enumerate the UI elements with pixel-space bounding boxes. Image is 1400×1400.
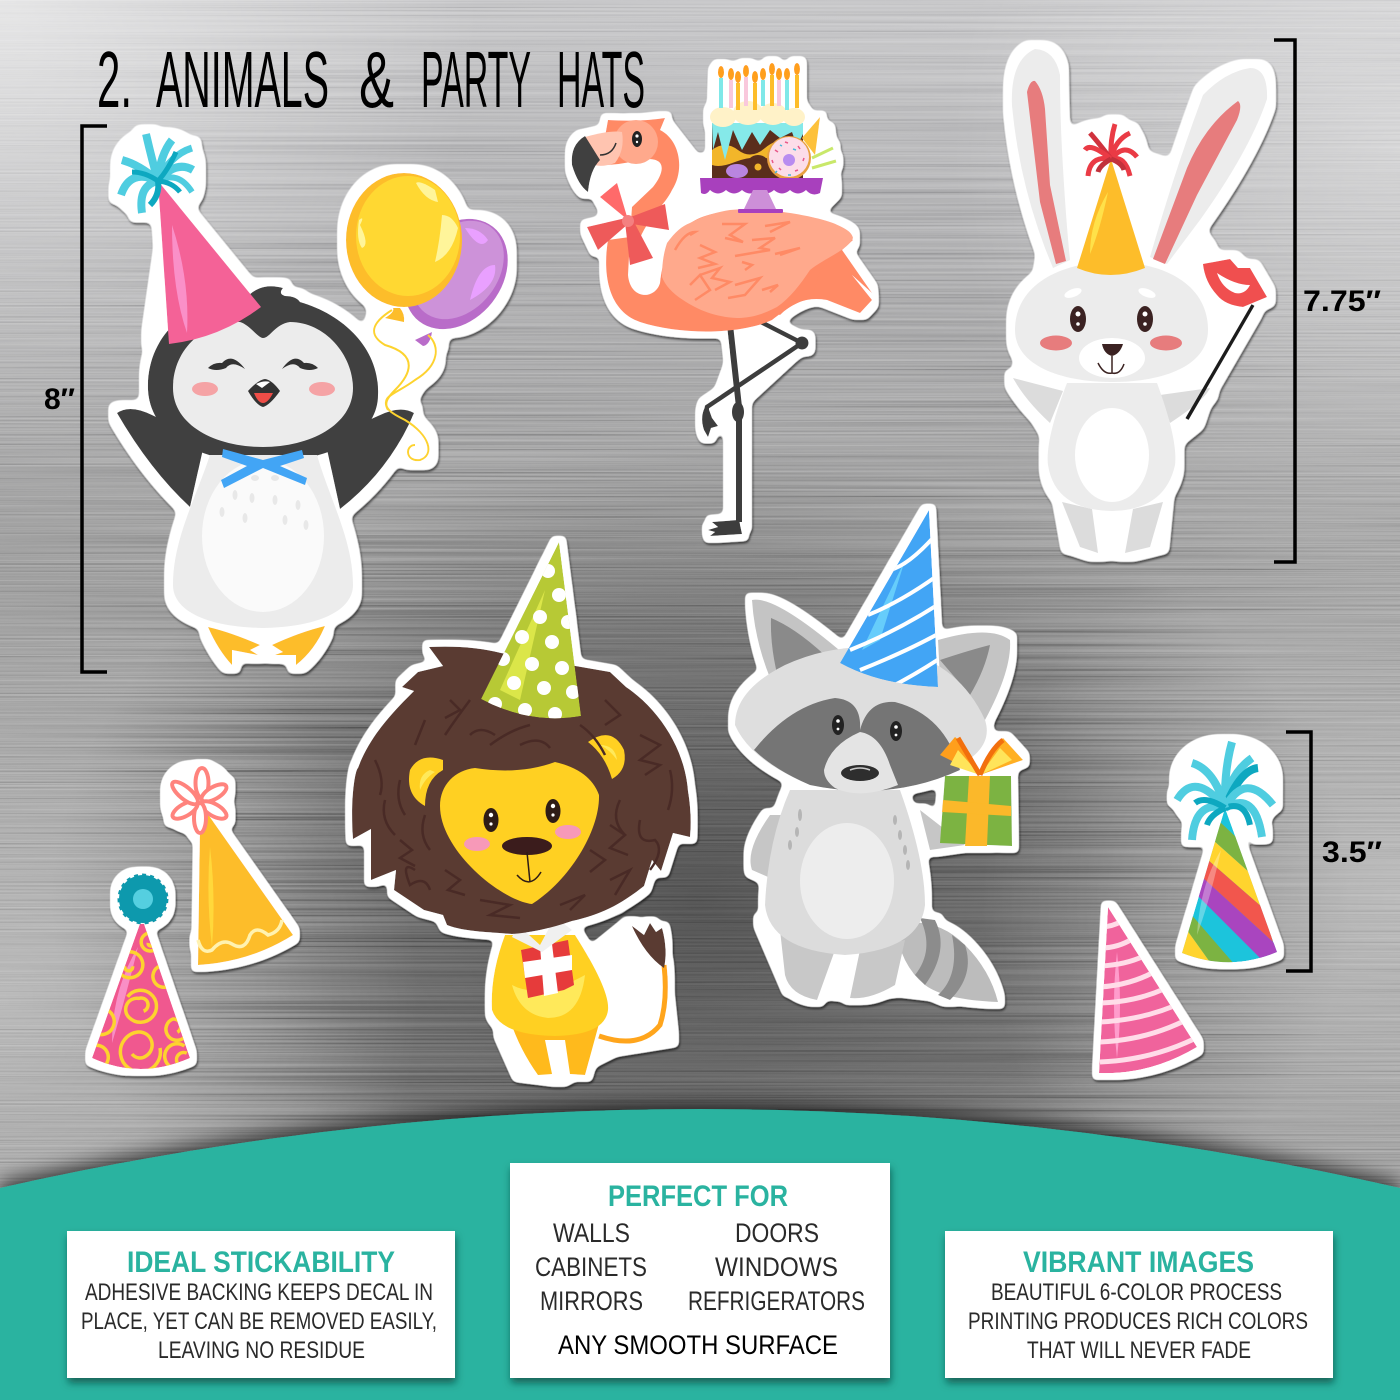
lion hat polka dots	[481, 542, 581, 721]
penguin arms	[117, 409, 414, 509]
balloon strings	[374, 310, 436, 460]
bunny hat	[1077, 159, 1145, 275]
gift bow	[940, 737, 1023, 775]
lion legs	[510, 1020, 600, 1075]
bracket: 3.5 inch	[1286, 732, 1311, 971]
cake stand	[700, 178, 823, 213]
lion tail	[599, 923, 666, 1041]
red bow	[587, 183, 669, 265]
small donut	[746, 155, 770, 179]
label: 3.5 inches: 3.5″	[1322, 836, 1382, 869]
spiral hat cone	[92, 918, 190, 1072]
title: ANIMALS	[156, 35, 329, 124]
sticker: lion	[352, 542, 691, 1080]
bracket: 7.75 inch	[1274, 40, 1295, 562]
lion belly	[512, 975, 585, 1018]
belly feathers	[220, 475, 308, 530]
lips on stick	[1187, 259, 1267, 419]
bunny legs	[1062, 502, 1163, 553]
raccoon legs	[780, 930, 905, 1000]
sticker: raccoon	[735, 510, 1023, 1002]
raccoon body	[765, 790, 925, 955]
title	[97, 35, 645, 124]
beak	[572, 132, 623, 192]
cake body	[712, 123, 803, 178]
raccoon hat	[840, 510, 945, 690]
purple balloon	[383, 198, 529, 350]
macaron	[726, 164, 748, 178]
body text: BEAUTIFUL 6-COLOR PROCESS	[991, 1279, 1282, 1306]
heading: ideal stickability: IDEAL STICKABILITY	[127, 1246, 395, 1279]
body text: PRINTING PRODUCES RICH COLORS	[968, 1308, 1308, 1335]
text: HATS	[557, 35, 645, 124]
bunny cheeks	[1040, 336, 1182, 350]
flamingo legs	[705, 320, 802, 522]
lion body	[492, 935, 608, 1036]
sprinkled donut	[767, 136, 811, 180]
bunny belly	[1075, 408, 1149, 502]
bunny nose and mouth	[1098, 344, 1124, 373]
flamingo wing	[662, 209, 853, 318]
body text: ADHESIVE BACKING KEEPS DECAL IN	[85, 1279, 433, 1306]
penguin face	[173, 322, 353, 447]
surface list: MIRRORS	[540, 1286, 643, 1316]
any smooth surface: ANY SMOOTH SURFACE	[558, 1330, 838, 1360]
wing feather strokes	[675, 222, 800, 300]
surface list: CABINETS	[535, 1252, 647, 1282]
lion face	[440, 762, 599, 904]
flamingo neck and head	[600, 118, 679, 238]
body text	[81, 1279, 437, 1364]
frosting	[710, 101, 805, 127]
teal fan pompom	[1177, 742, 1273, 840]
raccoon head	[735, 647, 987, 790]
eyes	[208, 359, 318, 370]
raccoon snout	[824, 732, 898, 793]
mane fur strokes	[375, 700, 672, 918]
bracket: 8 inch	[82, 126, 107, 672]
card: perfect for	[510, 1163, 890, 1378]
surface list: WINDOWS	[715, 1252, 838, 1282]
lion nose and mouth	[502, 837, 552, 882]
face patch	[614, 120, 658, 164]
bunny snout	[1079, 338, 1145, 378]
yellow hat cone	[198, 813, 293, 965]
title: PARTY	[421, 35, 531, 124]
bow tie blue	[221, 449, 307, 488]
card: ideal stickability	[67, 1231, 455, 1378]
lion mane	[352, 647, 691, 934]
body text: LEAVING NO RESIDUE	[158, 1337, 365, 1364]
teal pompom	[119, 875, 167, 923]
raccoon eyes	[832, 715, 902, 741]
surface list	[535, 1218, 865, 1316]
title: 2.	[97, 35, 132, 124]
sticker: penguin with balloons	[117, 134, 529, 665]
body text: THAT WILL NEVER FADE	[1027, 1337, 1251, 1364]
party hat pink	[158, 181, 261, 344]
raccoon belly	[800, 823, 894, 939]
bunny arms	[1013, 378, 1210, 423]
sticker: pink striped hat	[1099, 907, 1197, 1073]
bunny head	[1015, 262, 1208, 382]
gift red	[521, 940, 574, 998]
penguin body	[173, 455, 353, 628]
surface list: WALLS	[553, 1218, 630, 1248]
raccoon tail	[895, 918, 998, 1002]
surface list: DOORS	[735, 1218, 819, 1248]
penguin head	[148, 286, 378, 462]
candle flames	[718, 63, 800, 83]
rainbow cone	[1170, 808, 1280, 965]
penguin belly	[202, 460, 324, 612]
lion collar	[512, 917, 572, 952]
bunny body	[1048, 383, 1175, 511]
bunny pompom	[1085, 124, 1137, 176]
card: vibrant images	[945, 1231, 1333, 1378]
penguin feet	[208, 626, 325, 665]
lion eyes	[484, 799, 560, 832]
heading: perfect for: PERFECT FOR	[608, 1180, 788, 1213]
lion cheeks	[464, 825, 581, 851]
candles	[721, 75, 797, 110]
lion ears	[409, 735, 625, 806]
cheeks	[192, 382, 335, 396]
inner ears	[1027, 81, 1240, 264]
striped sticks	[812, 148, 836, 168]
ice cream cone	[802, 117, 820, 155]
surface list: REFRIGERATORS	[688, 1286, 865, 1316]
flamingo eye	[632, 131, 642, 147]
sticker: bunny	[1012, 49, 1267, 553]
bunny ears	[1012, 49, 1267, 268]
sticker: yellow hat with pink flower	[167, 767, 293, 965]
heading: vibrant images: VIBRANT IMAGES	[1023, 1246, 1254, 1279]
white pompom backing	[117, 874, 167, 924]
title: &	[359, 35, 394, 124]
yellow balloon	[346, 173, 462, 322]
label: 7.75 inches: 7.75″	[1303, 285, 1381, 318]
label: 8 inches: 8″	[44, 383, 75, 416]
bunny eyes	[1070, 306, 1153, 332]
leg joints and feet	[702, 336, 808, 536]
flamingo body and neck	[606, 211, 853, 332]
body text: PLACE, YET CAN BE REMOVED EASILY,	[81, 1308, 437, 1335]
pink flower pompom	[169, 768, 229, 833]
beak	[248, 379, 280, 407]
raccoon nose	[841, 765, 879, 781]
raccoon ears	[752, 600, 1010, 720]
sticker: rainbow hat	[1170, 741, 1280, 965]
gift box	[940, 776, 1012, 846]
teal arc panel	[0, 1109, 1400, 1400]
pompom teal	[121, 134, 193, 213]
head shine	[1063, 286, 1157, 300]
raccoon fur marks	[788, 809, 910, 870]
raccoon mask	[754, 698, 960, 791]
body text	[968, 1279, 1308, 1364]
sticker: flamingo with cake	[572, 63, 872, 536]
raccoon arms	[750, 810, 965, 880]
striped cone	[1099, 907, 1197, 1073]
flamingo tail feathers	[740, 247, 872, 315]
sticker: pink spiral hat	[92, 874, 190, 1072]
